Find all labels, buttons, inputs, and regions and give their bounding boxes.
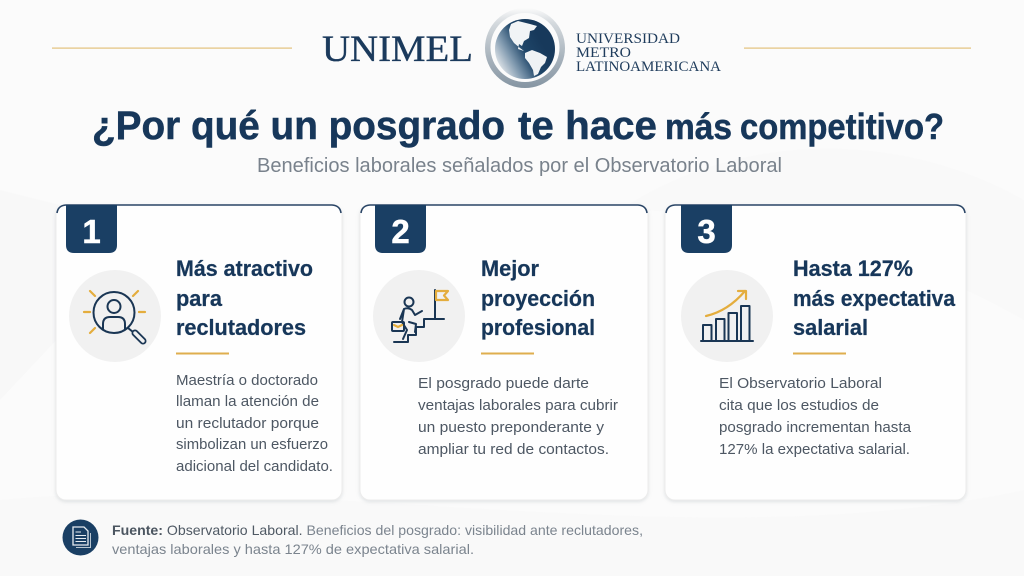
logo university name: LATINOAMERICANA bbox=[576, 59, 721, 75]
source text bbox=[112, 522, 643, 557]
card heading: más expectativa bbox=[793, 286, 956, 311]
title: te hace bbox=[518, 104, 657, 148]
card body text: 127% la expectativa salarial. bbox=[719, 441, 910, 458]
card body text: un reclutador porque bbox=[176, 415, 319, 432]
title: más bbox=[665, 106, 732, 147]
card body text: adicional del candidato. bbox=[176, 458, 333, 475]
panel: card 3 bbox=[665, 205, 966, 500]
card body text: cita que los estudios de bbox=[719, 397, 879, 414]
logo university name: METRO bbox=[576, 45, 631, 61]
card heading: Más atractivo bbox=[176, 256, 313, 281]
title: competitivo? bbox=[740, 106, 944, 147]
source note bbox=[62, 520, 643, 557]
gold accent bbox=[793, 352, 846, 354]
logo: UNIMEL bbox=[322, 8, 721, 88]
source text: Fuente: Observatorio Laboral. Beneficios del posgrado: visibilidad ante reclutadores, bbox=[112, 522, 643, 538]
number badge 1: 1 bbox=[82, 213, 101, 250]
card body text bbox=[719, 375, 912, 458]
card body text: posgrado incrementan hasta bbox=[719, 419, 912, 436]
card body text: simbolizan un esfuerzo bbox=[176, 436, 328, 453]
source text: ventajas laborales y hasta 127% de expectativa salarial. bbox=[112, 541, 474, 557]
card body text bbox=[176, 372, 333, 475]
card body text bbox=[418, 375, 618, 458]
panel: card 1 bbox=[56, 205, 342, 500]
card body text: un puesto preponderante y bbox=[418, 419, 605, 436]
card body text: llaman la atención de bbox=[176, 393, 319, 410]
logo university name: UNIVERSIDAD bbox=[576, 31, 680, 47]
card heading bbox=[481, 256, 595, 340]
icon: recruiter magnifier bbox=[69, 270, 161, 362]
icon: document bbox=[62, 520, 98, 556]
number badge 3: 3 bbox=[697, 213, 716, 250]
card heading: reclutadores bbox=[176, 315, 306, 340]
number badge 1 bbox=[66, 205, 117, 253]
card heading bbox=[176, 256, 313, 340]
card heading bbox=[793, 256, 956, 340]
logo university name bbox=[576, 31, 721, 75]
gold accent bbox=[481, 352, 534, 354]
icon: climbing stairs to flag bbox=[373, 270, 465, 362]
number badge 2: 2 bbox=[391, 213, 410, 250]
card heading: profesional bbox=[481, 315, 595, 340]
card heading: Hasta 127% bbox=[793, 256, 913, 281]
panel: card 2 bbox=[360, 205, 648, 500]
number badge 2 bbox=[375, 205, 426, 253]
card heading: proyección bbox=[481, 286, 595, 311]
subtitle: Beneficios laborales señalados por el Observatorio Laboral bbox=[257, 155, 782, 177]
card background bbox=[665, 205, 966, 500]
card heading: Mejor bbox=[481, 256, 539, 281]
decorative gold line left bbox=[52, 48, 292, 49]
decorative gold line right bbox=[744, 48, 971, 49]
logo wordmark: UNIMEL bbox=[322, 29, 473, 70]
card heading: salarial bbox=[793, 315, 868, 340]
card body text: El Observatorio Laboral bbox=[719, 375, 882, 392]
gold accent bbox=[176, 352, 229, 354]
card body text: ventajas laborales para cubrir bbox=[418, 397, 618, 414]
icon: rising bar chart bbox=[681, 270, 773, 362]
card heading: para bbox=[176, 286, 223, 311]
number badge 3 bbox=[681, 205, 732, 253]
card body text: ampliar tu red de contactos. bbox=[418, 441, 609, 458]
logo globe bbox=[485, 8, 565, 88]
card body text: El posgrado puede darte bbox=[418, 375, 589, 392]
card background bbox=[56, 205, 342, 500]
card background bbox=[360, 205, 648, 500]
card body text: Maestría o doctorado bbox=[176, 372, 318, 389]
title: ¿Por qué un posgrado bbox=[92, 104, 505, 148]
